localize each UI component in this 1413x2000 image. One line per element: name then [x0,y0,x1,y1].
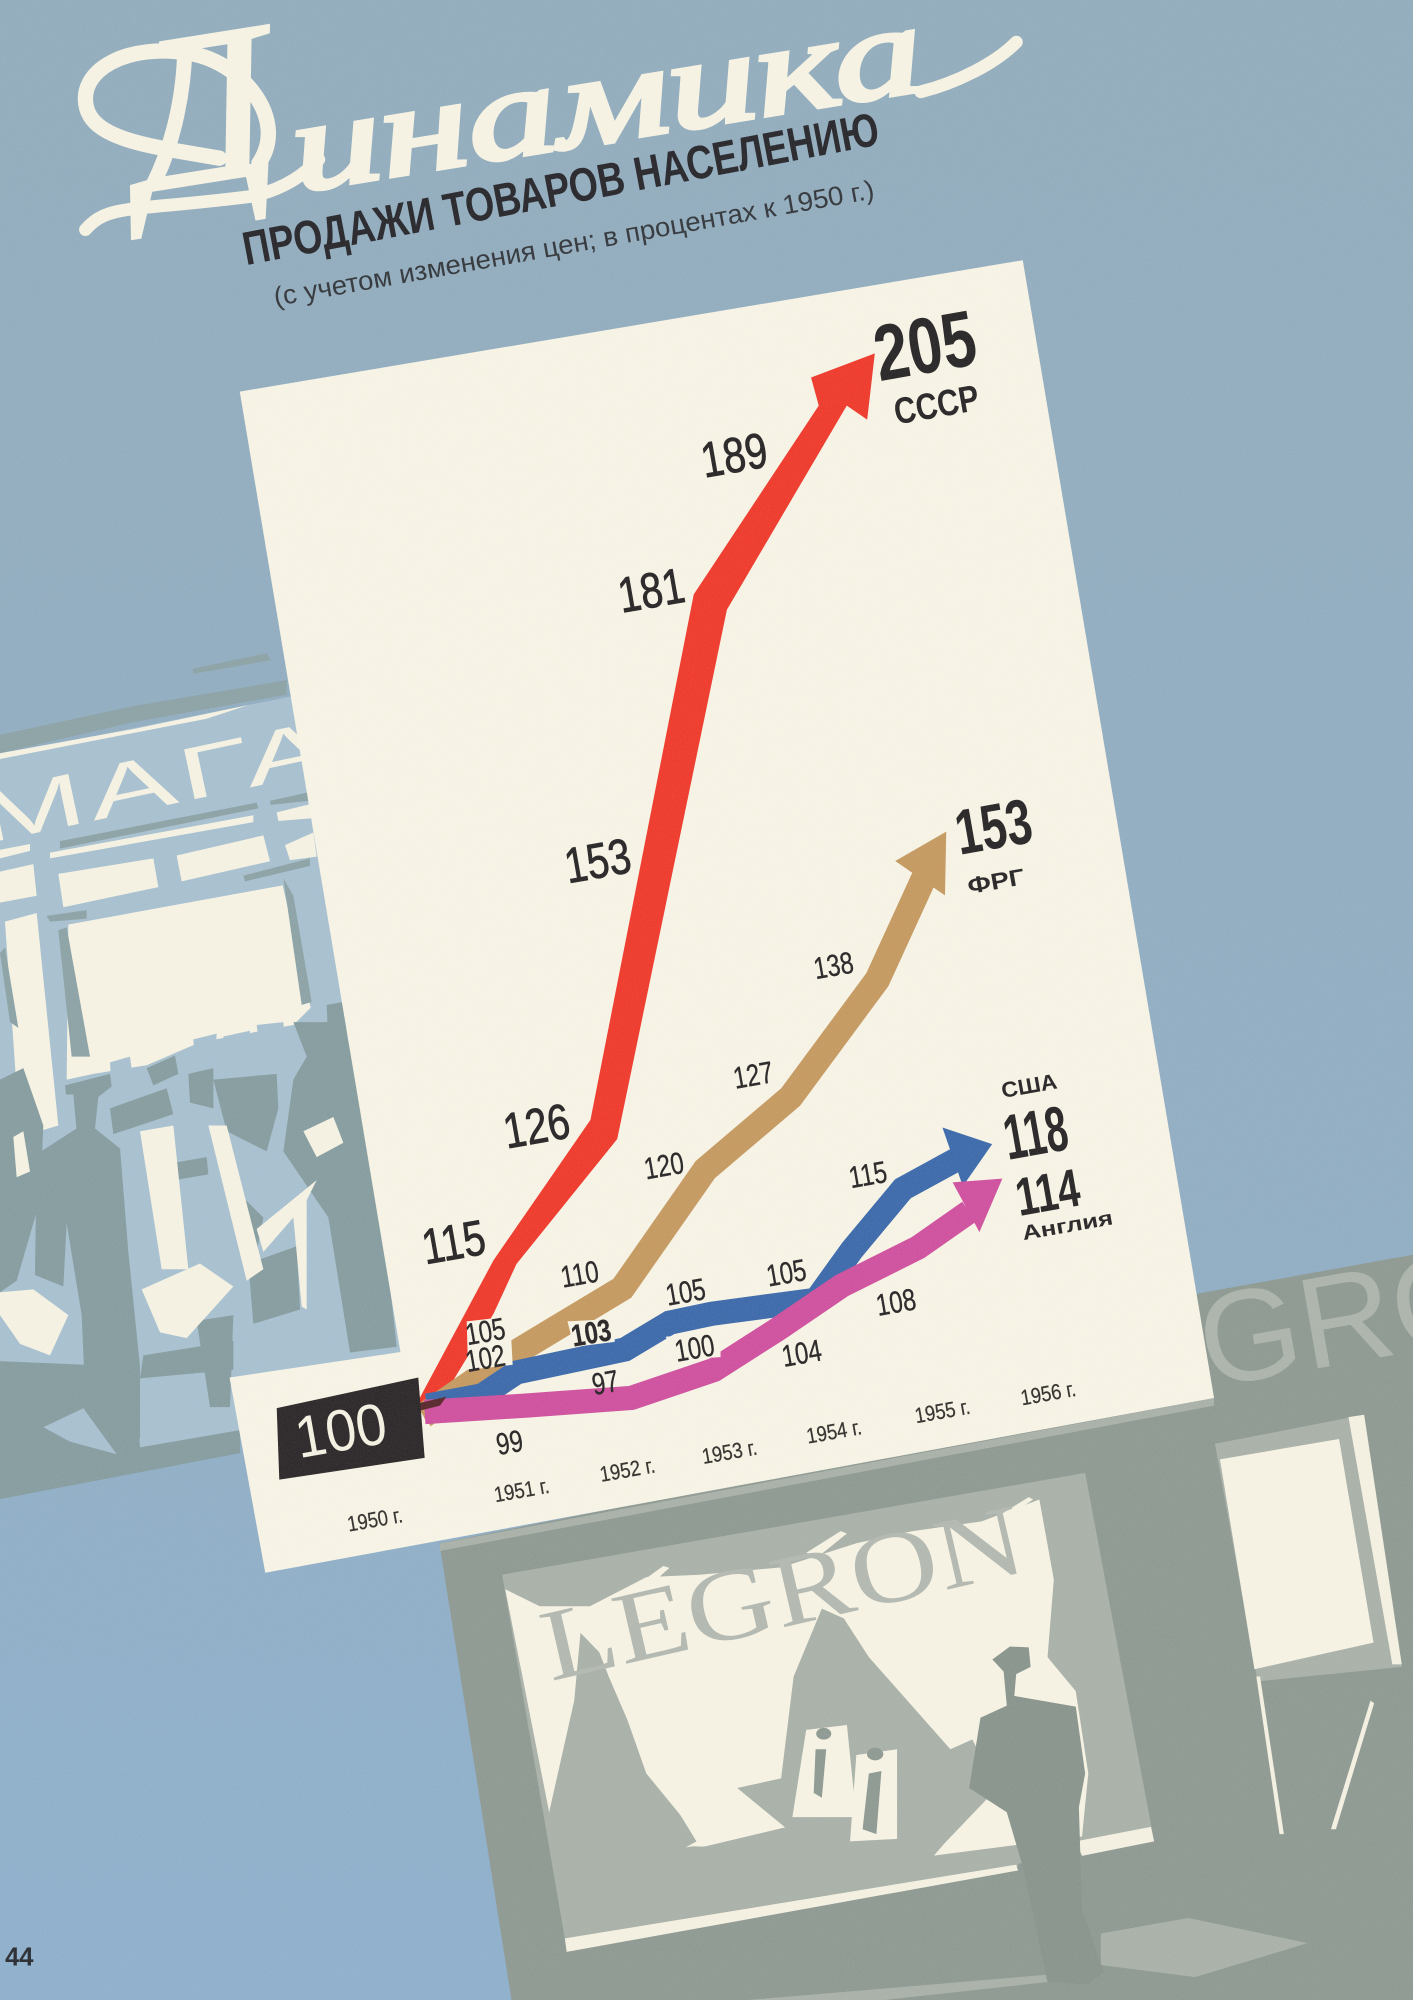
year axis labels: 1953 г. [700,1436,759,1469]
door reflections [1256,1677,1374,1834]
value labels: Англия: 99 [493,1423,526,1462]
value labels: Англия [493,1282,919,1462]
value labels: ФРГ: 102 [463,1338,508,1379]
centre drape [737,1609,997,1858]
value labels: США: 103 [569,1312,614,1353]
label: ФРГ 153: 153 [950,784,1037,869]
left store window [5,913,58,1137]
value labels: ФРГ: 120 [641,1145,686,1186]
value labels: ФРГ [463,945,856,1379]
display floor [559,1827,1018,1934]
label: США 118: США [999,1068,1059,1103]
heading: sales of goods to the population: ПРОДАЖИ ТОВАРОВ НАСЕЛЕНИЮ [238,102,883,275]
year axis labels: 1955 г. [913,1395,972,1429]
value labels: Англия: 97 [589,1363,621,1402]
page number: 44 [5,1944,34,1972]
floor patch [43,1408,117,1454]
crowd back row [110,1022,287,1183]
year axis labels: 1952 г. [598,1454,657,1487]
window interior [505,1500,1088,1866]
value labels: Англия: 108 [873,1282,919,1323]
curtain right strip [1076,1827,1154,1856]
year axis labels: 1954 г. [805,1416,864,1449]
value labels: ФРГ: 110 [558,1254,601,1294]
awning stripes [0,653,287,753]
illustration: LEGRON shop window [439,1204,1413,2000]
base value 100: 100 [290,1391,392,1471]
box marks [814,1728,883,1834]
cream line under awning [0,705,248,759]
main store window [67,885,311,1080]
left drape [549,1633,696,1868]
value labels: СССР: 153 [560,827,635,894]
value labels: ФРГ: 127 [731,1055,776,1096]
door frame [1215,1415,1402,1681]
label: США 118: 118 [998,1092,1073,1174]
value labels: СССР: 105 [463,1311,508,1352]
value labels: СССР: 126 [499,1093,574,1159]
label patches [467,1316,721,1370]
value labels: СССР: 115 [417,1209,490,1275]
store facade [0,695,440,1499]
label: ФРГ 153 [950,784,1037,899]
value labels: СССР: 189 [697,422,772,489]
label: Англия 114: 114 [1011,1159,1084,1228]
floor light patch [1101,1918,1308,1977]
panel: chart card [230,260,1214,1573]
window frame [502,1473,1154,1938]
label: США 118 [998,1068,1073,1174]
shop front [439,1255,1413,2000]
line chart [277,293,1115,1537]
door edge highlight [1348,1415,1402,1664]
window sill [565,1865,1018,1952]
display boxes [792,1725,856,1817]
line: ФРГ [423,832,946,1416]
base value 100 [277,1378,425,1480]
title flourish [85,42,1016,230]
shop name on window: LEGRON [531,1483,1034,1704]
illustration: department store with crowd [0,653,440,1499]
label: СССР 205: СССР [891,377,982,432]
value labels: Англия: 100 [672,1328,717,1368]
value labels: Англия: 104 [779,1333,824,1374]
line: США [427,1128,992,1406]
line: Англия [425,1179,1002,1412]
left drape fold [609,1667,725,1846]
year axis labels: 1951 г. [492,1475,551,1508]
label: СССР 205 [867,293,983,432]
man silhouette [969,1646,1104,1984]
window frame bars [0,792,312,1057]
label: Англия 114: Англия [1021,1207,1115,1245]
value labels: СССР: 181 [614,557,689,624]
label: СССР 205: 205 [867,293,983,398]
subheading: note on prices: (с учетом изменения цен; в процентах к 1950 г.) [271,175,876,312]
crowd figures [0,1002,397,1499]
swag highlights [624,1497,1033,1597]
card edge stripe [440,1398,1214,1551]
light clothes and parcels [0,1117,343,1355]
door glass [1220,1439,1374,1669]
year axis labels: 1956 г. [1019,1378,1078,1411]
label: ФРГ 153: ФРГ [965,863,1026,899]
value labels: ФРГ: 138 [811,945,856,986]
value labels: США: 105 [663,1271,708,1312]
value labels: США [569,1154,890,1353]
line: СССР [417,353,875,1423]
year axis labels [346,1378,1078,1537]
value labels: СССР [417,422,772,1352]
title [85,0,1016,242]
value labels: США: 105 [764,1252,809,1293]
transom windows [0,804,317,907]
value labels: США: 115 [846,1154,890,1195]
title text: инамика [280,0,932,219]
lines origin overlap [420,1397,446,1411]
year axis labels: 1950 г. [346,1504,405,1537]
